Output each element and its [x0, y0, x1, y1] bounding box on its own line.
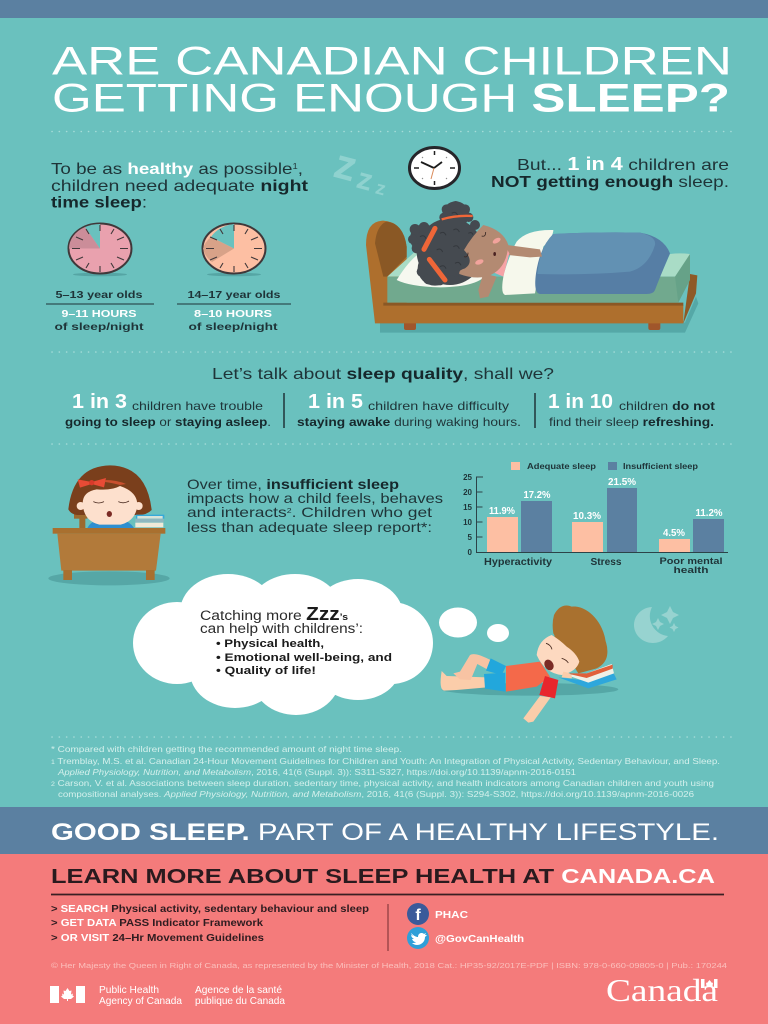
stat: 1 in 5	[297, 391, 521, 429]
bars: stress: 21.5%	[608, 477, 636, 488]
y axis: 5	[468, 533, 473, 542]
bubble text: • Physical health,	[216, 638, 324, 650]
y axis: 0	[468, 548, 473, 557]
bars: poor mental health: health	[674, 565, 709, 576]
text: insufficient sleep: and interacts	[187, 504, 267, 520]
icon: moon and stars	[634, 606, 679, 643]
y axis: 15	[463, 503, 473, 512]
text: healthy night time sleep: ,	[298, 161, 303, 178]
banner: good sleep	[0, 807, 768, 854]
label: 5–13 year olds: 9–11 HOURS	[62, 308, 136, 320]
stat: 1 in 10: find their sleep refreshing.	[549, 415, 714, 429]
text: healthy night time sleep: time sleep :	[51, 194, 147, 212]
bubble text: Catching more Zzz ’s	[200, 604, 348, 624]
illustration: boy sleeping on books	[441, 598, 618, 723]
illustration: girl sleeping in bed	[366, 201, 698, 333]
illustration: girl at desk	[48, 465, 170, 585]
stat: 1 in 5: staying awake during waking hours.	[297, 415, 521, 429]
banner: good sleep: GOOD SLEEP. PART OF A HEALTHY LIFESTYLE.	[51, 819, 719, 846]
footnotes: Applied Physiology, Nutrition, and Metabolism , 2016, 41(6 (Suppl. 3)): S311-S327, https://doi.org/10.1139/apnm-2016-0151	[57, 767, 576, 777]
footer panel: @GovCanHealth	[435, 934, 524, 945]
bars: poor mental health: 4.5%	[663, 528, 685, 539]
label: 14–17 year olds: 14–17 year olds	[188, 289, 281, 301]
label: 14–17 year olds	[177, 289, 291, 333]
icon: clock 5–13	[68, 224, 132, 276]
y axis: 25	[463, 473, 473, 482]
footer links: > OR VISIT 24–Hr Movement Guidelines	[51, 933, 264, 944]
icon: clock 14–17	[202, 224, 266, 276]
agency names: Agence de la santé	[195, 985, 283, 996]
icon: zzz: Z	[331, 149, 359, 188]
bubble text: • Quality of life!	[216, 665, 316, 677]
agency names: Agency of Canada	[99, 996, 183, 1007]
label: 14–17 year olds: of sleep/night	[188, 321, 278, 333]
icon: twitter	[407, 927, 429, 949]
footer panel	[0, 854, 768, 1024]
footnotes: compositional analyses. Applied Physiology, Nutrition, and Metabolism , 2016, 41(6 (Suppl. 3)): S294-S302, https://doi.org/10.1139/apnm-2016-0026	[58, 789, 694, 799]
title	[52, 40, 732, 120]
bar chart	[463, 461, 728, 576]
footer heading: LEARN MORE ABOUT SLEEP HEALTH AT CANADA.CA	[51, 866, 715, 888]
stat: 1 in 3: children have trouble	[132, 399, 263, 413]
text: 1 in 4: NOT getting enough sleep.	[491, 174, 729, 191]
legend	[511, 461, 698, 471]
icon: zzz	[331, 149, 387, 198]
bars: poor mental health: 11.2%	[696, 508, 723, 519]
bars: poor mental health: Poor mental	[660, 556, 722, 567]
legend: Adequate sleep	[527, 461, 596, 471]
bars: stress: Stress	[590, 557, 622, 568]
stat: 1 in 5: 1 in 5	[308, 391, 363, 413]
small thought bubbles	[439, 608, 509, 642]
text: insufficient sleep: less than adequate sleep report*:	[187, 519, 432, 535]
text: insufficient sleep: impacts how a child feels, behaves	[187, 490, 443, 506]
bars: hyperactivity	[484, 490, 552, 568]
bubble text	[200, 604, 392, 677]
icon: facebook	[407, 903, 429, 925]
text: healthy night time sleep: To be as healthy as possible	[51, 161, 278, 178]
footer links	[51, 904, 369, 944]
label: 14–17 year olds: 8–10 HOURS	[194, 308, 272, 320]
stat: 1 in 5: children have difficulty	[368, 399, 509, 413]
bars: poor mental health	[659, 508, 724, 576]
y axis: 20	[463, 488, 473, 497]
footnotes: * Compared with children getting the recommended amount of night time sleep.	[51, 744, 402, 754]
text: insufficient sleep	[187, 476, 443, 535]
bars: hyperactivity: 11.9%	[489, 506, 515, 517]
text: insufficient sleep: 2	[287, 508, 292, 515]
text: insufficient sleep: Over time, insufficient sleep	[187, 476, 399, 492]
icon: facebook: f	[415, 907, 421, 924]
footer links: > GET DATA PASS Indicator Framework	[51, 918, 263, 929]
stat: 1 in 10	[548, 391, 715, 429]
title: GETTING ENOUGH SLEEP?	[52, 76, 730, 120]
legend: Insufficient sleep	[623, 461, 698, 471]
bars: stress	[572, 477, 637, 568]
stat: 1 in 10: children do not	[619, 399, 715, 413]
icon: canada flag	[50, 986, 85, 1003]
divider	[284, 393, 535, 428]
agency names: Public Health	[99, 985, 159, 996]
footnotes	[51, 744, 720, 799]
label: 5–13 year olds: of sleep/night	[54, 321, 144, 333]
text: healthy night time sleep	[51, 161, 309, 212]
bars: hyperactivity: Hyperactivity	[484, 557, 552, 568]
footer links: > SEARCH Physical activity, sedentary behaviour and sleep	[51, 904, 369, 915]
stat: 1 in 10: 1 in 10	[548, 391, 613, 413]
footnotes: 1 Tremblay, M.S. et al. Canadian 24-Hour Movement Guidelines for Children and Youth: An Integration of Physical Activity, Sedentary Behaviour, and Sleep.	[51, 756, 720, 766]
stat: 1 in 3	[65, 391, 271, 429]
text: sleep quality: Let’s talk about sleep quality , shall we?	[212, 366, 554, 383]
thought bubble	[133, 574, 433, 715]
agency names	[99, 985, 286, 1007]
icon: zzz: Z	[355, 168, 374, 195]
label: 5–13 year olds: 5–13 year olds	[56, 289, 143, 301]
stat: 1 in 3: 1 in 3	[72, 391, 127, 413]
bars: stress: 10.3%	[573, 511, 601, 522]
bars: hyperactivity: 17.2%	[524, 490, 551, 501]
y axis	[463, 473, 728, 557]
icon: zzz: Z	[374, 180, 387, 198]
bubble text: • Emotional well-being, and	[216, 652, 392, 664]
text: 1 in 4	[491, 154, 729, 191]
bubble text: can help with childrens’:	[200, 621, 363, 636]
text: 1 in 4: But... 1 in 4 children are	[517, 154, 729, 174]
canada wordmark: Canada	[606, 972, 718, 1008]
text: insufficient sleep: . Children who get	[292, 504, 432, 520]
copyright: © Her Majesty the Queen in Right of Canada, as represented by the Minister of Health, 2018 Cat.: HP35-92/2017E-PDF | ISBN: 978-0-660-09805-0 | Pub.: 170244	[51, 961, 727, 970]
agency names: publique du Canada	[195, 996, 286, 1007]
footer panel: PHAC	[435, 910, 468, 921]
y axis: 10	[463, 518, 473, 527]
text: healthy night time sleep: children need adequate night	[51, 178, 309, 195]
icon: wall clock	[410, 148, 460, 188]
label: 5–13 year olds	[46, 289, 154, 333]
hair	[408, 201, 483, 286]
footnotes: 2 Carson, V. et al. Associations between sleep duration, sedentary time, physical activity, and health indicators among Canadian children and youth using	[51, 778, 714, 788]
text: healthy night time sleep: 1	[293, 162, 298, 171]
title: ARE CANADIAN CHILDREN	[52, 40, 732, 84]
top band	[0, 0, 768, 18]
stat: 1 in 3: going to sleep or staying asleep .	[65, 415, 271, 429]
